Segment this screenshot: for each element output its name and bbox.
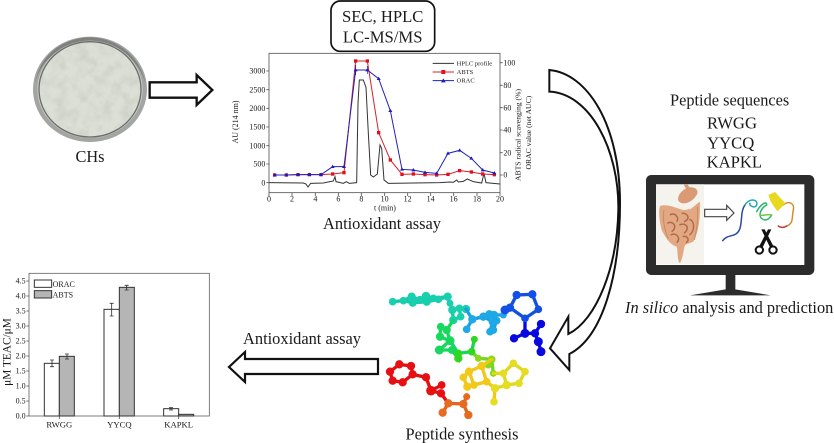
series: HPLC profile [269,80,500,187]
chain: blue [501,291,545,356]
x axis labels: RWGG [46,420,72,430]
bar legend: ABTS [53,290,73,299]
icon: scissors [756,229,777,254]
x axis labels: 10 [381,195,389,204]
sequence list: RWGG [707,114,757,133]
sequence list: KAPKL [707,153,762,172]
left axis labels: 1000 [249,141,265,150]
left axis labels: 2000 [249,104,265,113]
caption: antioxidant assay (bottom): Antioxidant assay [243,329,362,348]
bar legend: ORAC [53,280,75,289]
left axis labels: 0 [261,178,265,187]
bars: YYCQ [104,285,134,416]
x axis labels: 16 [450,195,458,204]
sequence list [707,114,762,172]
x axis labels: 12 [404,195,412,204]
arrow: digestion [705,205,734,220]
powder sample with label [33,37,147,166]
method box: SEC, HPLC [342,7,423,26]
x axis labels: 0 [267,195,271,204]
chain: gold [460,359,528,405]
chart legend: ABTS [457,69,474,76]
left axis labels [249,67,265,187]
chain: green [435,320,496,376]
right axis labels: 40 [503,126,511,135]
icon: monitor [646,175,814,295]
y axis labels: 4.0 [16,292,26,301]
x axis labels: 20 [496,195,504,204]
x axis labels: 8 [359,195,363,204]
bar chart [1,273,209,430]
right axis titles: ABTS radical scavenging (%) [514,89,523,181]
x axis labels [267,195,504,213]
chart legend: ORAC [457,78,475,85]
rotated left axis title: AU (214 nm) [231,100,240,144]
icon: peptide ribbon [723,200,794,241]
right axis labels: 100 [503,58,515,67]
y axis labels: 3.5 [16,307,26,316]
chart legend [433,60,492,85]
x axis labels: 4 [313,195,317,204]
icon: digestive tract [656,184,704,264]
x axis labels: t (min) [374,204,396,213]
chart legend: HPLC profile [457,60,492,67]
y axis title: μM TEAC/μM [1,318,13,386]
chain: cyan [463,309,506,335]
x axis labels: YYCQ [107,420,132,430]
right axis titles [514,89,533,181]
bars: KAPKL [164,408,194,416]
left axis labels: 2500 [249,85,265,94]
molecule 3D model [386,291,545,443]
caption: in silico: In silico analysis and prediction [624,298,833,317]
right axis labels: 60 [503,103,511,112]
caption: antioxidant assay (top): Antioxidant assay [323,214,442,233]
chromatogram chart [249,53,533,213]
bars: RWGG [44,354,74,416]
arrow: powder to chromatography [150,75,212,105]
series: ABTS [273,59,496,177]
method box [331,1,435,51]
right axis labels: 0 [503,171,507,180]
x axis labels: 14 [427,195,435,204]
x axis labels: 6 [336,195,340,204]
y axis labels: 2.0 [16,352,26,361]
left axis labels: 500 [253,160,265,169]
right axis labels [503,58,515,180]
y axis labels [16,277,26,421]
right axis labels: 20 [503,148,511,157]
method box: LC-MS/MS [343,28,422,47]
left axis labels: 3000 [249,67,265,76]
bar legend [34,280,75,299]
series: ORAC [273,65,496,176]
icon: powder dish [33,37,147,142]
arrow: synthesis to assay [229,352,378,382]
chain: teal [389,292,470,324]
left axis labels: 1500 [249,123,265,132]
chain: red and orange [386,361,472,419]
arrow: curved to peptide synthesis [549,70,620,370]
x axis labels: 2 [290,195,294,204]
y axis labels: 3.0 [16,322,26,331]
y axis labels: 1.5 [16,367,26,376]
y axis labels: 4.5 [16,277,26,286]
y axis labels: 2.5 [16,337,26,346]
x axis labels: 18 [473,195,481,204]
x axis labels [46,420,193,430]
icon: yellow sheet [768,192,785,211]
panel: in silico [624,90,833,317]
y axis labels: 0.0 [16,412,26,421]
heading: peptide sequences: Peptide sequences [670,90,789,109]
y axis labels: 0.5 [16,397,26,406]
x axis labels: KAPKL [164,420,193,430]
y axis labels: 1.0 [16,382,26,391]
sequence list: YYCQ [707,134,754,153]
right axis titles: ORAC value (net AUC) [524,95,533,170]
label: CHs: CHs [75,147,105,166]
right axis labels: 80 [503,81,511,90]
